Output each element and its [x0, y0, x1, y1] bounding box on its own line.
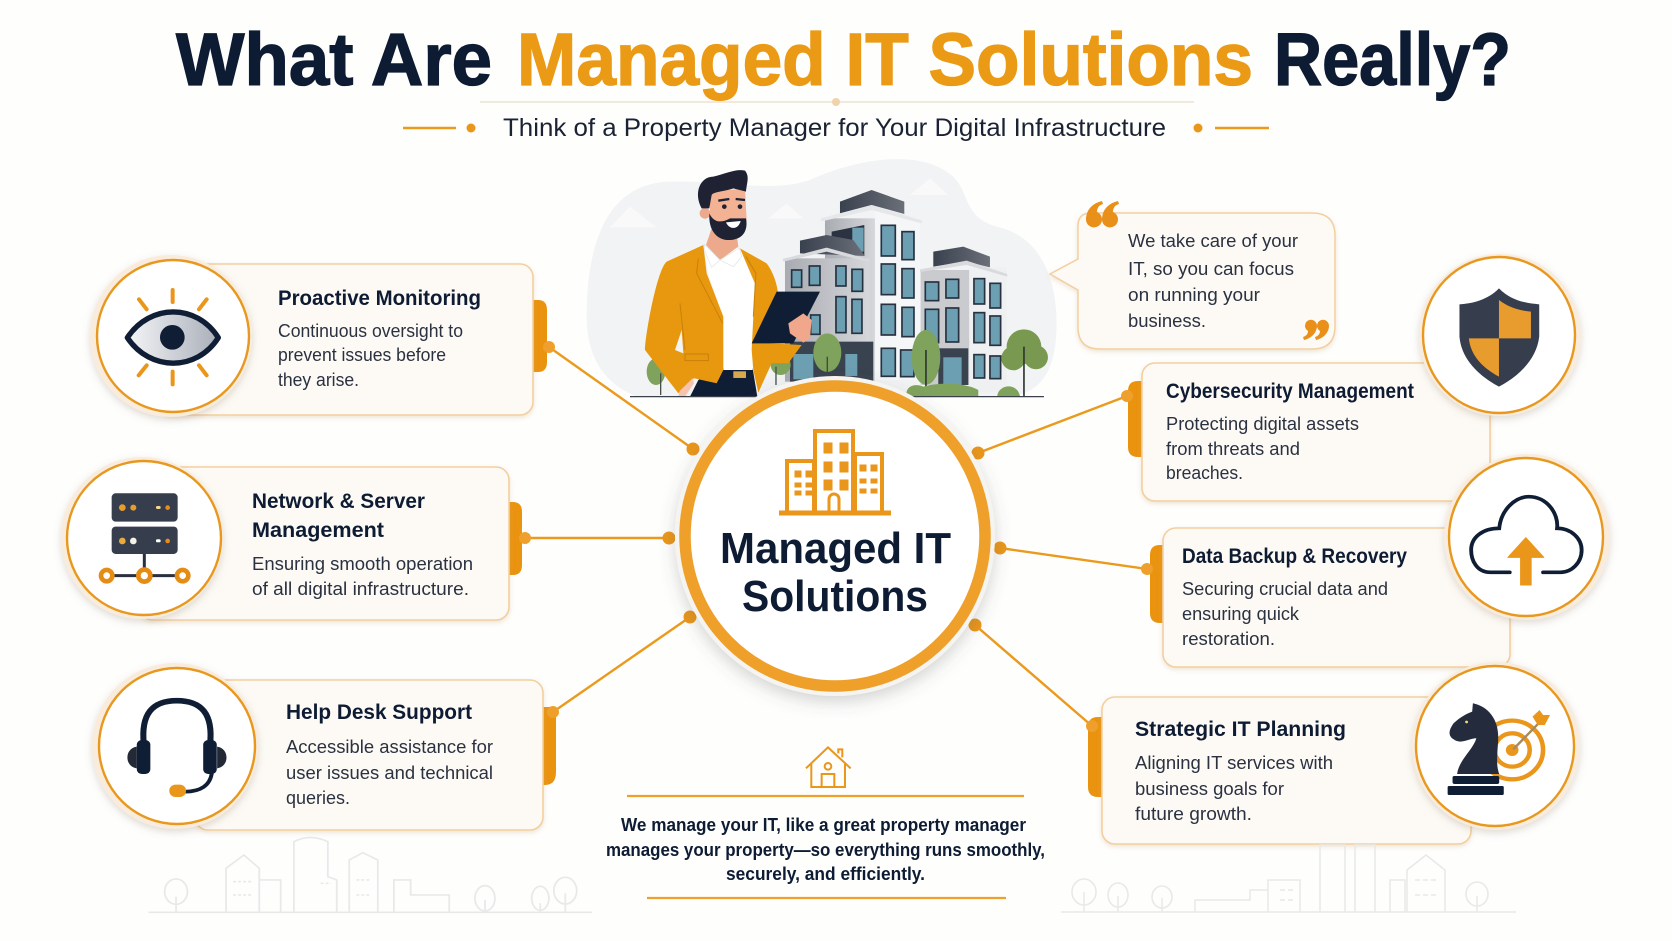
hub label: Managed IT [720, 524, 951, 573]
quote bubble [1050, 201, 1335, 349]
heading: Network & Server [252, 490, 425, 513]
description: breaches. [1166, 463, 1243, 483]
description [1182, 579, 1388, 649]
description: Aligning IT services with [1135, 753, 1333, 773]
description: user issues and technical [286, 763, 493, 783]
closing statement: manages your property—so everything runs smoothly, [606, 840, 1045, 860]
heading: Data Backup & Recovery [1182, 545, 1407, 568]
title [176, 18, 1511, 101]
icon: chess knight and target [1448, 703, 1550, 795]
center hub: Managed IT Solutions [675, 376, 995, 696]
icon: city buildings [779, 431, 891, 513]
heading: Management [252, 519, 384, 542]
panel: Data Backup & Recovery [1141, 454, 1610, 667]
description: from threats and [1166, 439, 1300, 459]
left building [783, 235, 873, 382]
subtitle: Think of a Property Manager for Your Digital Infrastructure [503, 114, 1166, 142]
quote text: IT, so you can focus [1128, 259, 1294, 279]
heading: Strategic IT Planning [1135, 718, 1346, 741]
quote text: business. [1128, 311, 1206, 331]
icon: house [806, 747, 851, 787]
heading: Help Desk Support [286, 701, 472, 724]
description: queries. [286, 788, 350, 808]
subtitle [403, 98, 1269, 142]
hub label [720, 524, 951, 621]
icon: cloud upload [1471, 497, 1582, 585]
skyline right [1061, 845, 1516, 912]
description: Protecting digital assets [1166, 414, 1359, 434]
skyline left [149, 837, 592, 912]
closing statement [606, 796, 1045, 898]
man [645, 170, 820, 397]
panel: Proactive Monitoring [90, 255, 555, 417]
illustration: property manager and buildings [587, 159, 1057, 397]
description: restoration. [1182, 629, 1275, 649]
title: What Are [176, 18, 492, 101]
closing statement: We manage your IT, like a great property manager [621, 815, 1026, 835]
description: Ensuring smooth operation [252, 554, 473, 574]
description: Continuous oversight to [278, 321, 463, 341]
description [252, 554, 473, 599]
heading: Cybersecurity Management [1166, 380, 1414, 403]
icon: eye [127, 290, 218, 384]
description [1135, 753, 1333, 824]
icon: headset [127, 701, 226, 797]
heading [252, 490, 425, 542]
description: prevent issues before [278, 345, 446, 365]
description [1166, 414, 1359, 483]
connector lines [525, 347, 1147, 726]
quote text: We take care of your [1128, 231, 1298, 251]
panel: Help Desk Support [92, 663, 559, 830]
trees [647, 329, 1048, 396]
description: business goals for [1135, 779, 1284, 799]
panel: Cybersecurity Management [1121, 254, 1581, 501]
title: Really? [1274, 18, 1511, 101]
description [286, 737, 493, 808]
closing statement: securely, and efficiently. [726, 864, 925, 884]
icon: closing quote [1303, 320, 1329, 340]
title: Managed IT Solutions [517, 18, 1253, 101]
description: future growth. [1135, 804, 1252, 824]
description: Securing crucial data and [1182, 579, 1388, 599]
icon: opening quote [1086, 201, 1119, 227]
quote text: on running your [1128, 285, 1260, 305]
description: ensuring quick [1182, 604, 1300, 624]
description [278, 321, 463, 390]
panel: Network & Server Management [61, 457, 531, 620]
heading: Proactive Monitoring [278, 287, 481, 310]
center building [821, 190, 922, 382]
panel: Strategic IT Planning [1086, 662, 1580, 844]
description: of all digital infrastructure. [252, 579, 469, 599]
description: they arise. [278, 370, 359, 390]
right building [920, 247, 1007, 392]
hub label: Solutions [742, 572, 928, 621]
icon: server network [101, 493, 188, 582]
quote text [1128, 231, 1298, 331]
icon: shield [1459, 288, 1539, 387]
description: Accessible assistance for [286, 737, 493, 757]
